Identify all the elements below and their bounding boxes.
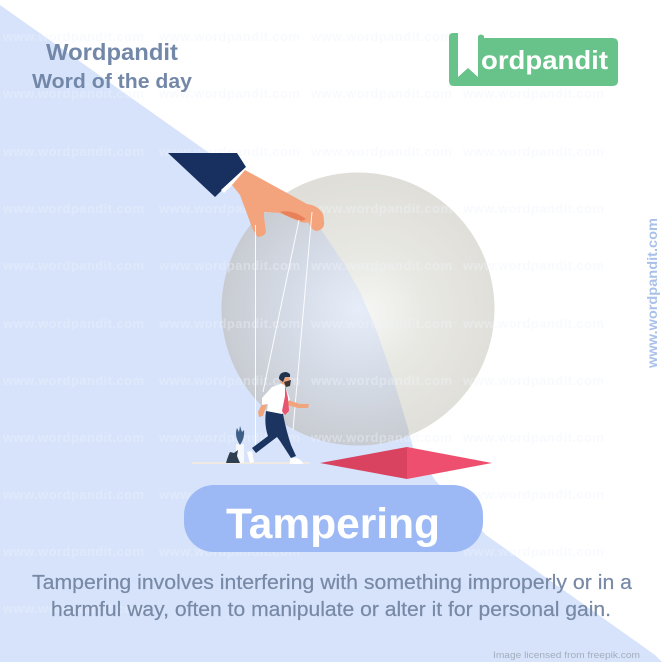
sphere <box>222 172 494 446</box>
watermark pattern: www.wordpandit.com <box>462 86 604 101</box>
watermark pattern: www.wordpandit.com <box>2 258 144 273</box>
watermark pattern: www.wordpandit.com <box>2 144 144 159</box>
watermark pattern: www.wordpandit.com <box>462 373 604 388</box>
watermark pattern: www.wordpandit.com <box>310 316 452 331</box>
watermark pattern: www.wordpandit.com <box>310 430 452 445</box>
watermark pattern: www.wordpandit.com <box>2 601 144 616</box>
watermark pattern: www.wordpandit.com <box>2 487 144 502</box>
logo wordmark: ordpandit <box>481 45 608 75</box>
illustration: plant <box>226 426 244 463</box>
word: Tampering: Tampering <box>226 500 440 548</box>
definition text: harmful way, often to manipulate or alter it for personal gain. <box>51 599 611 621</box>
watermark pattern: www.wordpandit.com <box>2 86 144 101</box>
watermark pattern: www.wordpandit.com <box>158 316 300 331</box>
title block <box>32 39 193 93</box>
cuff <box>221 167 248 193</box>
logo: Wordpandit <box>449 33 618 86</box>
watermark pattern: www.wordpandit.com <box>158 430 300 445</box>
watermark pattern: www.wordpandit.com <box>158 373 300 388</box>
shirt <box>262 383 290 414</box>
watermark pattern: www.wordpandit.com <box>158 29 300 44</box>
hand <box>232 170 324 237</box>
head <box>280 375 290 385</box>
watermark pattern: www.wordpandit.com <box>462 144 604 159</box>
illustration: puppeteer hand <box>168 153 324 237</box>
watermark pattern: www.wordpandit.com <box>158 86 300 101</box>
watermark pattern: www.wordpandit.com <box>310 144 452 159</box>
tie <box>282 385 289 415</box>
floor line <box>192 462 310 464</box>
shoes <box>247 451 303 464</box>
trousers <box>252 411 296 458</box>
watermark pattern: www.wordpandit.com <box>462 430 604 445</box>
heading: Wordpandit: Wordpandit <box>46 39 178 65</box>
arms <box>258 400 309 417</box>
watermark pattern: www.wordpandit.com <box>462 544 604 559</box>
sleeve <box>168 153 246 197</box>
icon: bookmark W <box>458 33 478 77</box>
watermark pattern: www.wordpandit.com <box>462 316 604 331</box>
watermark pattern: www.wordpandit.com <box>158 487 300 502</box>
watermark pattern: www.wordpandit.com <box>158 544 300 559</box>
watermark pattern: www.wordpandit.com <box>462 487 604 502</box>
watermark pattern: www.wordpandit.com <box>310 86 452 101</box>
definition text: Tampering involves interfering with something improperly or in a <box>32 572 633 594</box>
watermark pattern: www.wordpandit.com <box>158 258 300 273</box>
watermark pattern: www.wordpandit.com <box>2 316 144 331</box>
watermark pattern: www.wordpandit.com <box>310 373 452 388</box>
illustration: red diamond <box>320 447 492 479</box>
watermark pattern: www.wordpandit.com <box>2 430 144 445</box>
watermark pattern: www.wordpandit.com <box>158 144 300 159</box>
watermark pattern: www.wordpandit.com <box>462 258 604 273</box>
illustration: walking man <box>192 372 310 464</box>
word pill <box>184 485 483 552</box>
watermark pattern: www.wordpandit.com <box>2 373 144 388</box>
watermark pattern: www.wordpandit.com <box>158 201 300 216</box>
watermark pattern: www.wordpandit.com <box>462 201 604 216</box>
subheading: Word of the day: Word of the day <box>32 71 193 93</box>
watermark pattern: www.wordpandit.com <box>310 201 452 216</box>
puppet strings <box>256 212 312 452</box>
watermark pattern: www.wordpandit.com <box>2 544 144 559</box>
watermark pattern: www.wordpandit.com <box>310 29 452 44</box>
watermark pattern: www.wordpandit.com <box>2 29 144 44</box>
definition text <box>32 572 633 621</box>
watermark pattern: www.wordpandit.com <box>2 201 144 216</box>
watermark pattern: www.wordpandit.com <box>310 258 452 273</box>
vertical site url: www.wordpandit.com <box>645 218 660 369</box>
image credit: Image licensed from freepik.com <box>493 650 640 661</box>
